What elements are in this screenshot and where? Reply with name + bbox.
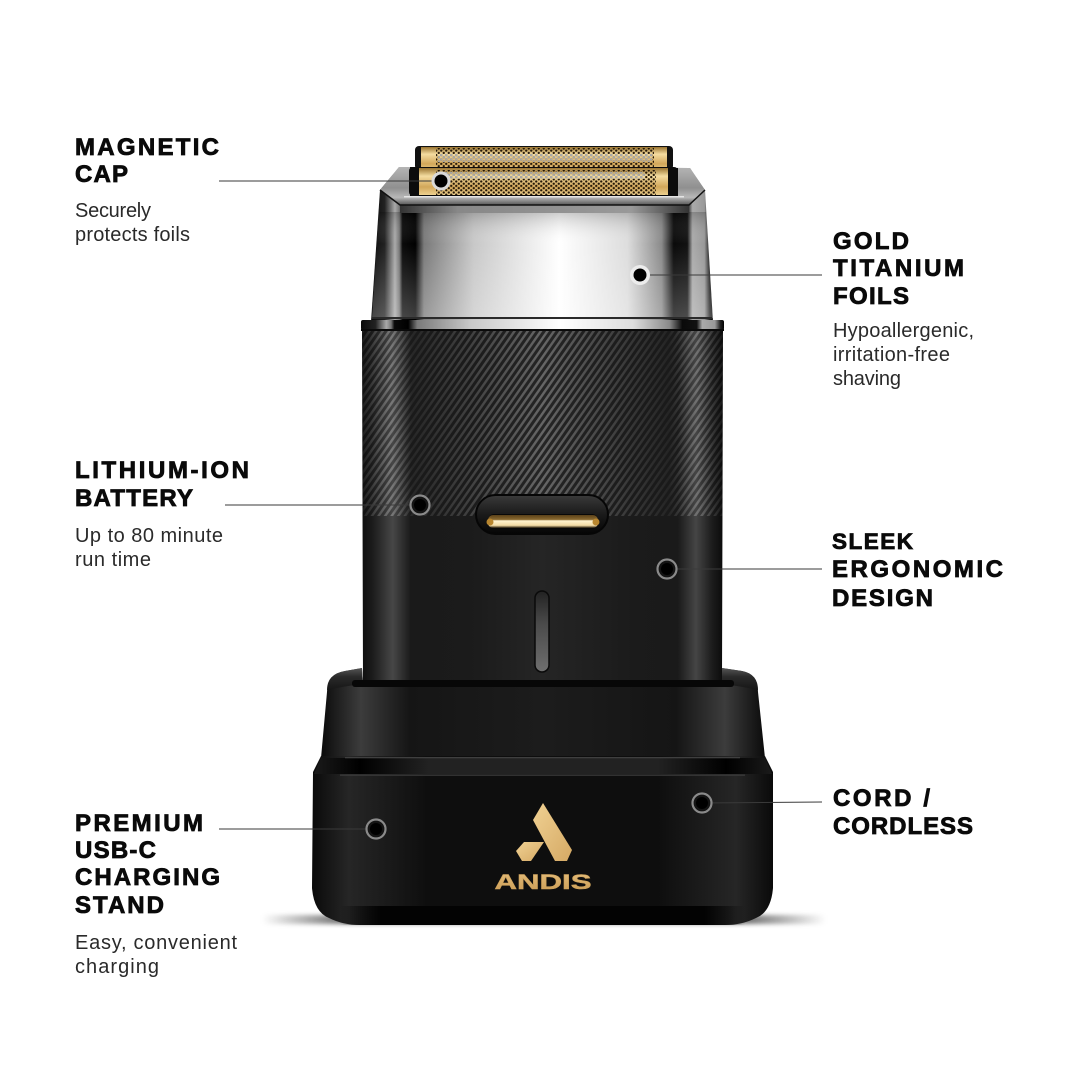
back gold foil bbox=[415, 146, 673, 171]
cord heading: CORD / bbox=[833, 785, 930, 812]
lithium-ion description: Up to 80 minute bbox=[75, 525, 223, 547]
callout: lithium-ion battery bbox=[75, 457, 430, 571]
magnetic cap description: protects foils bbox=[75, 224, 190, 246]
gold titanium heading: TITANIUM bbox=[833, 255, 964, 282]
shaver body bbox=[362, 331, 723, 686]
charging stand upper bbox=[321, 668, 765, 758]
sleek ergonomic heading: DESIGN bbox=[832, 585, 933, 612]
gold titanium heading: GOLD bbox=[833, 228, 909, 255]
gold titanium leader bbox=[630, 265, 822, 285]
Andis logo mark bbox=[516, 803, 572, 861]
magnetic cap leader bbox=[219, 172, 450, 190]
callout: sleek ergonomic design bbox=[658, 529, 1003, 612]
callout: magnetic cap bbox=[75, 134, 450, 246]
collar bbox=[361, 320, 724, 331]
premium stand description: Easy, convenient bbox=[75, 932, 237, 954]
callout: gold titanium foils bbox=[630, 228, 974, 390]
gold titanium description: Hypoallergenic, bbox=[833, 320, 974, 342]
sleek ergonomic heading: ERGONOMIC bbox=[832, 556, 1003, 583]
gold titanium heading: FOILS bbox=[833, 283, 909, 310]
gold titanium description: shaving bbox=[833, 368, 901, 390]
magnetic cap heading: MAGNETIC bbox=[75, 134, 219, 161]
ground shadow bbox=[262, 915, 826, 924]
lithium-ion leader bbox=[225, 496, 430, 514]
stand socket shadow bbox=[352, 680, 734, 687]
stand groove bbox=[314, 758, 772, 774]
diagonal texture bbox=[362, 331, 723, 516]
chrome head bbox=[371, 167, 713, 322]
front gold foil bbox=[404, 167, 684, 198]
sleek ergonomic leader bbox=[658, 560, 822, 578]
Andis wordmark: ANDIS bbox=[494, 871, 592, 894]
stand base band bbox=[340, 906, 745, 925]
magnetic cap description: Securely bbox=[75, 200, 151, 222]
premium stand description: charging bbox=[75, 956, 159, 978]
stand lip right bbox=[722, 668, 758, 690]
sleek ergonomic heading: SLEEK bbox=[832, 529, 914, 554]
charging stand lower bbox=[312, 756, 773, 925]
premium stand heading: PREMIUM bbox=[75, 810, 203, 837]
callout: cord / cordless bbox=[692, 785, 973, 840]
callout: premium usb-c charging stand bbox=[75, 810, 386, 978]
premium stand heading: CHARGING bbox=[75, 864, 220, 891]
power button bbox=[476, 495, 608, 534]
premium stand heading: STAND bbox=[75, 892, 164, 919]
gold titanium description: irritation-free bbox=[833, 344, 950, 366]
magnetic cap heading: CAP bbox=[75, 161, 128, 188]
premium stand leader bbox=[219, 820, 386, 838]
cord leader bbox=[692, 794, 822, 812]
cord heading: CORDLESS bbox=[833, 813, 973, 840]
stand lip left bbox=[327, 668, 363, 690]
shaver product illustration bbox=[262, 146, 826, 925]
lithium-ion heading: LITHIUM-ION bbox=[75, 457, 249, 484]
lithium-ion description: run time bbox=[75, 549, 151, 571]
lithium-ion heading: BATTERY bbox=[75, 485, 193, 512]
charge indicator slot bbox=[535, 591, 549, 672]
premium stand heading: USB-C bbox=[75, 837, 156, 864]
